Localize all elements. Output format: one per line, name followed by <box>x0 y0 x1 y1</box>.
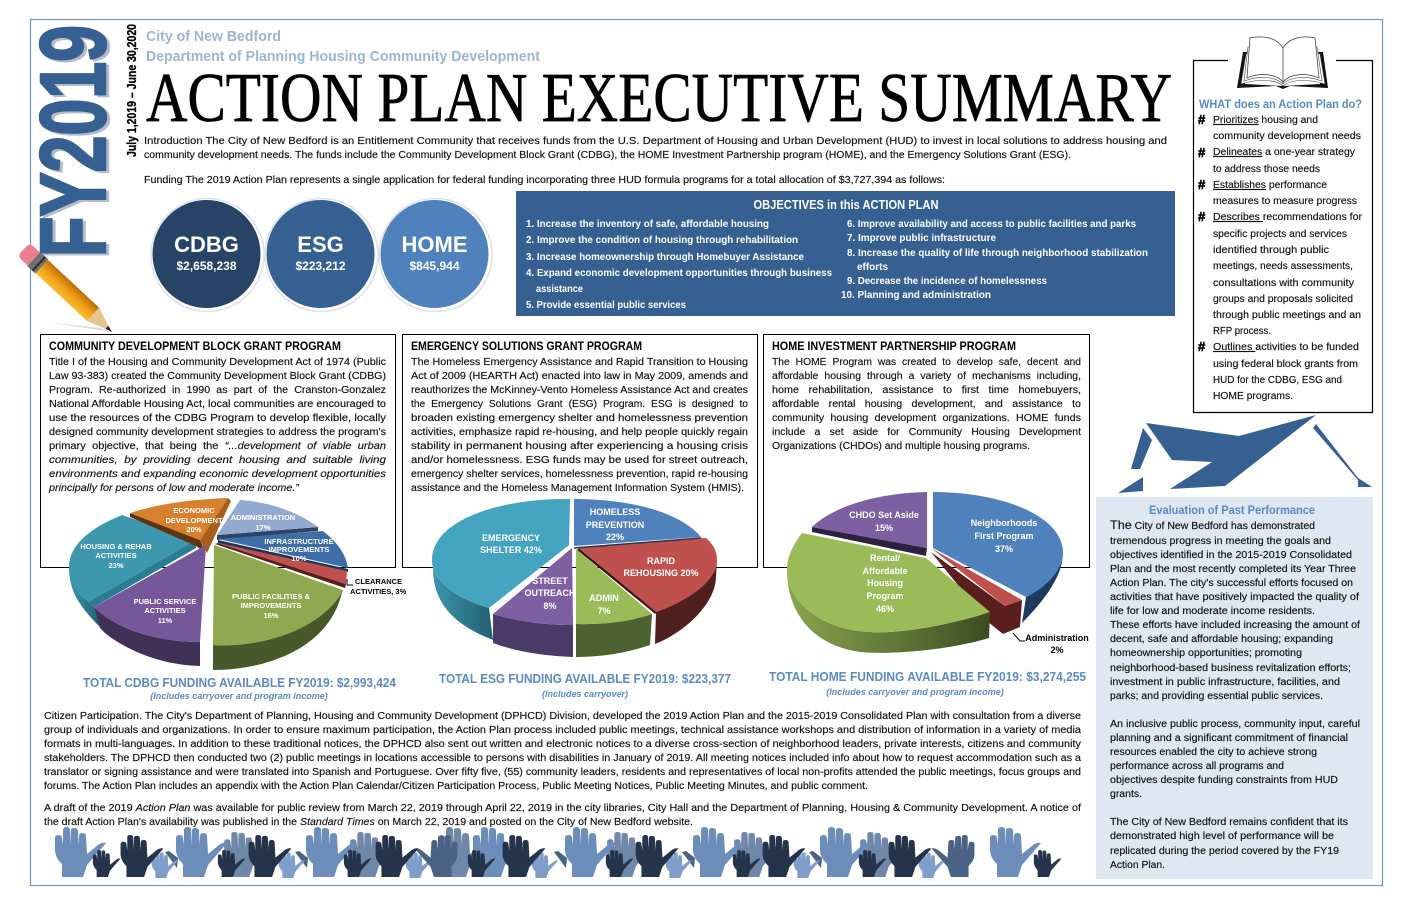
chart labels: HOMELESS <box>590 507 640 517</box>
caption: HOME total <box>769 669 1086 697</box>
text block: citizen participation: group of individuals and organizations. In order to ensure maximum participation, the Action Plan process included public meetings, technical assistance workshops and distribution of information in a variety of media <box>44 725 1081 736</box>
panel: CDBG program: designed community development strategies to address the program's <box>49 427 386 438</box>
chart labels: ADMINISTRATION <box>231 513 295 522</box>
funding circle: HOME: HOME <box>402 232 468 257</box>
panel: CDBG program: Program. Re-authorized in 1990 as part of the Cranston-Gonzalez <box>49 385 386 396</box>
slice: rental and affordable housing <box>787 533 990 653</box>
panel: ESG program: assistance and the Homeless Management Information System (HMIS). <box>411 483 744 494</box>
panel: HOME program: The HOME Program was created to develop safe, decent and <box>772 357 1081 368</box>
chart labels <box>849 510 1089 655</box>
panel: HOME program: HOME INVESTMENT PARTNERSHIP PROGRAM <box>772 341 1016 353</box>
chart labels: ECONOMIC <box>173 506 215 515</box>
panel: objectives: 7. Improve public infrastructure <box>847 233 996 244</box>
chart labels: 20% <box>186 525 202 534</box>
panel: objectives: 1. Increase the inventory of safe, affordable housing <box>526 219 769 230</box>
introduction text: community development needs. The funds include the Community Development Block Grant (CDBG), the HOME Investment Partnership program (HOME), and the Emergency Solutions Grant (ESG). <box>144 150 1071 161</box>
list text: Delineates a one-year strategy <box>1213 147 1355 158</box>
panel: evaluation of past performance: planning and a significant commitment of financial <box>1110 733 1348 744</box>
chart labels: 2% <box>1050 645 1064 655</box>
chart labels: ACTIVITIES, 3% <box>350 587 407 596</box>
chart labels <box>80 506 407 625</box>
funding circle: CDBG: CDBG <box>174 232 239 257</box>
caption: ESG total: TOTAL ESG FUNDING AVAILABLE FY2019: $223,377 <box>439 671 731 686</box>
text block: draft availability <box>44 803 1081 828</box>
panel: evaluation of past performance: neighborhood-based business revitalization efforts; <box>1110 663 1351 674</box>
funding text: Funding The 2019 Action Plan represents a single application for federal funding incorporating three HUD formula programs for a total allocation of $3,727,394 as follows: <box>144 175 945 186</box>
panel: objectives: 3. Increase homeownership through Homebuyer Assistance <box>526 252 804 263</box>
list text: through public meetings and an <box>1213 310 1361 321</box>
text block: citizen participation: Citizen Participation. The City's Department of Planning, Housing and Community Development (DPHCD) Division, developed the 2019 Action Plan and the 2015-2019 Consolidated Plan with consultation from a diverse <box>44 711 1081 722</box>
funding circle: ESG: ESG <box>297 232 344 257</box>
slice: public facilities and improvements <box>213 545 343 670</box>
list text: Prioritizes housing and <box>1213 115 1318 126</box>
panel: HOME program: include a set aside for Community Housing Development <box>772 427 1081 438</box>
list bullets: # <box>1198 209 1206 224</box>
text block: citizen participation <box>44 711 1081 792</box>
list text: Establishes performance <box>1213 180 1327 191</box>
vertical date range: July 1,2019 – June 30,2020 <box>125 24 139 157</box>
panel: CDBG program: Law 93-383) created the Community Development Block Grant (CDBG) <box>49 371 386 382</box>
organization name: City of New Bedford <box>146 28 281 45</box>
chart: CDBG pie <box>69 498 407 670</box>
list text: measures to measure progress <box>1213 196 1357 207</box>
funding circle: CDBG: $2,658,238 <box>176 259 237 273</box>
list bullets: # <box>1198 145 1206 160</box>
panel: ESG program: stability in permanent housing after experiencing a housing crisis <box>411 441 748 452</box>
panel: objectives: 2. Improve the condition of housing through rehabilitation <box>526 235 798 246</box>
panel: objectives: 5. Provide essential public services <box>526 300 686 311</box>
chart labels: 10% <box>291 554 307 563</box>
panel: evaluation of past performance: investment in public infrastructure, facilities, and <box>1110 677 1340 688</box>
title: ACTION PLAN EXECUTIVE SUMMARY <box>146 60 1172 137</box>
text block: citizen participation: forums. The Action Plan includes an appendix with the Action Plan Calendar/Citizen Participation Process, Public Meeting Notices, Public Meeting Minutes, and public comment. <box>44 781 868 792</box>
slice: housing and rehab <box>69 515 196 627</box>
chart labels: 7% <box>597 606 611 616</box>
chart labels: PUBLIC SERVICE <box>134 597 196 606</box>
chart labels: OUTREACH <box>524 588 576 598</box>
slice: street outreach <box>493 548 573 657</box>
panel: ESG program: EMERGENCY SOLUTIONS GRANT PROGRAM <box>411 341 642 353</box>
chart labels: Neighborhoods <box>971 518 1037 528</box>
chart labels: Program <box>866 591 904 601</box>
slice: rapid rehousing <box>578 538 717 644</box>
chart labels: REHOUSING 20% <box>623 568 699 578</box>
slice: emergency shelter <box>432 499 570 640</box>
chart labels: ACTIVITIES <box>144 606 186 615</box>
chart labels: RAPID <box>647 556 675 566</box>
panel: evaluation of past performance: homeownership opportunities; promoting <box>1110 648 1302 659</box>
panel: evaluation of past performance: demonstrated high level of performance will be <box>1110 831 1334 842</box>
panel: ESG program: reauthorizes the McKinney-Vento Homeless Assistance Act and creates <box>411 385 748 396</box>
panel: CDBG program: Title I of the Housing and Community Development Act of 1974 (Public <box>49 357 386 368</box>
icon: open book <box>1237 37 1328 89</box>
panel: evaluation of past performance: These efforts have included increasing the amount of <box>1110 620 1360 631</box>
chart: HOME pie <box>787 492 1089 655</box>
list text: specific projects and services <box>1213 229 1347 240</box>
panel: objectives: 4. Expand economic development opportunities through business <box>526 268 832 279</box>
caption: HOME total: (Includes carryover and program income) <box>826 687 1004 697</box>
panel: CDBG program: primary objective, that being the “...development of viable urban <box>49 441 386 452</box>
panel: HOME program <box>764 334 1090 568</box>
funding circle: CDBG <box>151 198 264 312</box>
panel: ESG program: emergency shelter services, homelessness prevention, rapid re-housing <box>411 469 748 480</box>
panel: ESG program: Act of 2009 (HEARTH Act) enacted into law in May 2009, amends and <box>411 371 748 382</box>
panel: evaluation of past performance: parks; and providing essential public services. <box>1110 691 1323 702</box>
panel: CDBG program: environments and expanding economic development opportunities <box>49 469 386 480</box>
panel: evaluation of past performance: tremendous progress in meeting the goals and <box>1110 536 1331 547</box>
panel: ESG program: activities, emphasize rapid re-housing, and help people quickly regain <box>411 427 748 438</box>
chart labels: 16% <box>263 611 279 620</box>
panel: evaluation of past performance: life for low and moderate income residents. <box>1110 606 1315 617</box>
caption: ESG total <box>439 671 731 699</box>
text block: draft availability: the draft Action Plan's availability was published in the Standard Times on March 22, 2019 and posted on the City of New Bedford website. <box>44 817 693 828</box>
panel: objectives: 10. Planning and administration <box>841 290 991 301</box>
panel: HOME program: affordable rental housing development, and assistance to <box>772 399 1081 410</box>
panel: objectives: assistance <box>536 284 583 295</box>
panel: evaluation of past performance: Evaluation of Past Performance <box>1149 503 1315 517</box>
list text: RFP process. <box>1213 326 1271 337</box>
panel: CDBG program: principally for persons of low and moderate income.” <box>48 483 300 494</box>
list bullets: # <box>1198 112 1206 127</box>
list bullets: # <box>1198 177 1206 192</box>
panel: HOME program: affordable housing through a variety of mechanisms including, <box>772 371 1081 382</box>
icon: pencil <box>17 243 118 339</box>
list text: HUD for the CDBG, ESG and <box>1213 375 1342 386</box>
panel: evaluation of past performance: An inclusive public process, community input, careful <box>1110 719 1360 730</box>
chart labels: 23% <box>108 561 124 570</box>
slice: neighborhoods first program <box>933 492 1063 623</box>
chart labels: Affordable <box>862 566 908 576</box>
slice: clearance activities <box>215 543 347 588</box>
chart labels: 8% <box>543 601 557 611</box>
panel: what does an action plan do: WHAT does an Action Plan do? <box>1199 97 1362 111</box>
text block: draft availability: A draft of the 2019 Action Plan was available for public review from March 22, 2019 through April 22, 2019 in the city libraries, City Hall and the Department of Planning, Housing & Community Development. A notice of <box>44 803 1081 814</box>
panel: objectives: 6. Improve availability and access to public facilities and parks <box>847 219 1136 230</box>
chart labels: HOUSING & REHAB <box>80 542 152 551</box>
panel: ESG program: broaden existing emergency shelter and homelessness prevention <box>411 413 748 424</box>
panel: evaluation of past performance: Action Plan. The city's successful efforts focused on <box>1110 578 1353 589</box>
list text <box>1213 115 1363 402</box>
list text: meetings, needs assessments, <box>1213 261 1353 272</box>
chart labels: 46% <box>876 604 894 614</box>
list text: using federal block grants from <box>1213 359 1358 370</box>
chart labels: Rental/ <box>870 553 900 563</box>
list text: to address those needs <box>1213 164 1320 175</box>
panel: HOME program: home rehabilitation, assistance to first time homebuyers, <box>772 385 1081 396</box>
slice: administration <box>931 548 1022 634</box>
panel: evaluation of past performance: objectives identified in the 2015-2019 Consolidated <box>1110 550 1352 561</box>
slice: economic development <box>130 498 231 553</box>
chart labels: INFRASTRUCTURE <box>264 537 334 546</box>
funding circle: ESG: $223,212 <box>295 259 346 273</box>
chart labels: DEVELOPMENT <box>165 516 223 525</box>
panel: ESG program <box>402 334 758 568</box>
chart labels: First Program <box>974 531 1034 541</box>
list text: Outlines activities to be funded <box>1213 342 1359 353</box>
icon row: raised hands <box>55 827 1061 878</box>
panel: evaluation of past performance: The City of New Bedford remains confident that its <box>1110 817 1348 828</box>
slice: public service activities <box>94 545 206 666</box>
panel: CDBG program: use the resources of the CDBG Program to develop flexible, locally <box>49 413 386 424</box>
funding circle: HOME: $845,944 <box>409 259 460 273</box>
list text: HOME programs. <box>1213 391 1293 402</box>
slice: CHDO set aside <box>812 492 927 556</box>
panel: evaluation of past performance: Action Plan. <box>1110 860 1165 871</box>
chart labels: CHDO Set Aside <box>849 510 919 520</box>
chart labels: 37% <box>995 544 1013 554</box>
panel: objectives: 9. Decrease the incidence of homelessness <box>847 276 1047 287</box>
icon: house roof <box>1118 415 1372 493</box>
panel: evaluation of past performance: objectives despite funding constraints from HUD <box>1110 775 1338 786</box>
list text: Describes recommendations for <box>1213 212 1363 223</box>
caption: CDBG total: (Includes carryover and program income) <box>150 691 328 701</box>
caption: CDBG total: TOTAL CDBG FUNDING AVAILABLE FY2019: $2,993,424 <box>83 675 397 690</box>
panel: CDBG program <box>40 334 396 568</box>
caption: HOME total: TOTAL HOME FUNDING AVAILABLE FY2019: $3,274,255 <box>769 669 1086 684</box>
chart labels: PUBLIC FACILITIES & <box>232 592 311 601</box>
panel: HOME program: Organizations (CHDOs) and multiple housing programs. <box>772 441 1030 452</box>
introduction text <box>144 136 1167 161</box>
text block: citizen participation: stakeholders. The DPHCD then conducted two (2) public meetings in locations accessible to persons with disabilities in January of 2019. All meeting notices included info about how to request accommodation such as a <box>44 753 1081 764</box>
panel: HOME program: community housing development organizations. HOME funds <box>772 413 1081 424</box>
panel: evaluation of past performance: The City of New Bedford has demonstrated <box>1110 518 1315 532</box>
panel: CDBG program: National Affordable Housing Act, local communities are encouraged to <box>49 399 386 410</box>
panel: evaluation of past performance: Plan and the most recently completed its Year Three <box>1110 564 1356 575</box>
panel: evaluation of past performance: activities that have positively impacted the quality of <box>1110 592 1359 603</box>
panel: CDBG program: COMMUNITY DEVELOPMENT BLOCK GRANT PROGRAM <box>49 341 341 353</box>
introduction text: Introduction The City of New Bedford is an Entitlement Community that receives funds from the U.S. Department of Housing and Urban Development (HUD) to invest in local solutions to address housing and <box>144 136 1167 147</box>
chart labels: Housing <box>867 578 903 588</box>
panel: evaluation of past performance <box>1096 497 1373 879</box>
caption: CDBG total <box>83 675 397 701</box>
panel: evaluation of past performance: resources enabled the city to achieve strong <box>1110 747 1317 758</box>
chart labels: Administration <box>1025 633 1089 643</box>
panel: ESG program: The Homeless Emergency Assistance and Rapid Transition to Housing <box>411 357 748 368</box>
caption: ESG total: (Includes carryover) <box>542 689 628 699</box>
chart labels: STREET <box>532 576 568 586</box>
text block: citizen participation: translator or signing assistance and were translated into Spanish and Portuguese. Over fifty five, (55) community leaders, residents and representatives of local non-profits attended the public meetings, focus groups and <box>44 767 1081 778</box>
slice: administration <box>217 500 318 540</box>
list text: identified through public <box>1213 245 1329 256</box>
chart labels: IMPROVEMENTS <box>241 601 301 610</box>
panel: what does an action plan do <box>1194 37 1372 412</box>
funding circle: ESG <box>265 198 378 312</box>
panel: evaluation of past performance: performance across all programs and <box>1110 761 1284 772</box>
chart labels: ADMIN <box>589 593 619 603</box>
chart labels: 17% <box>255 523 271 532</box>
slice: admin <box>576 549 652 657</box>
panel: evaluation of past performance: decent, safe and affordable housing; expanding <box>1110 634 1333 645</box>
chart labels: EMERGENCY <box>482 533 540 543</box>
organization name <box>146 28 540 65</box>
slice: homeless prevention <box>574 499 701 548</box>
panel: objectives: efforts <box>857 262 888 273</box>
list text: community development needs <box>1213 131 1361 142</box>
funding circle: HOME <box>379 198 492 312</box>
list text: groups and proposals solicited <box>1213 294 1353 305</box>
list bullets: # <box>1198 339 1206 354</box>
chart labels: SHELTER 42% <box>480 545 542 555</box>
panel: CDBG program: communities, by providing decent housing and suitable living <box>49 455 387 466</box>
slice: infrastructure improvements <box>218 531 348 572</box>
panel: ESG program: and/or homelessness. ESG funds may be used for street outreach, <box>411 455 748 466</box>
chart labels: 15% <box>875 523 893 533</box>
panel: evaluation of past performance: grants. <box>1110 789 1142 800</box>
panel: ESG program: the Emergency Solutions Grant (ESG) Program. ESG is designed to <box>411 399 748 410</box>
panel: objectives: 8. Increase the quality of life through neighborhood stabilization <box>847 248 1148 259</box>
list text: consultations with community <box>1213 278 1354 289</box>
chart labels: ACTIVITIES <box>95 551 137 560</box>
chart labels <box>480 507 699 616</box>
chart labels: 11% <box>158 616 173 625</box>
panel: objectives: OBJECTIVES in this ACTION PLAN <box>754 197 938 212</box>
text block: citizen participation: formats in multi-languages. In addition to these traditional notices, the DPHCD also sent out written and electronic notices to a diverse cross-section of neighborhood leaders, private interests, citizens and community <box>44 739 1081 750</box>
chart labels: CLEARANCE <box>355 577 402 586</box>
panel: objectives <box>516 191 1175 316</box>
chart labels: PREVENTION <box>586 520 644 530</box>
chart: ESG pie <box>432 499 717 657</box>
panel: evaluation of past performance: replicated during the period covered by the FY19 <box>1110 846 1339 857</box>
chart labels: 22% <box>606 532 624 542</box>
organization name: Department of Planning Housing Community Development <box>146 48 540 65</box>
list bullets <box>1198 112 1206 354</box>
chart labels: IMPROVEMENTS <box>269 545 329 554</box>
